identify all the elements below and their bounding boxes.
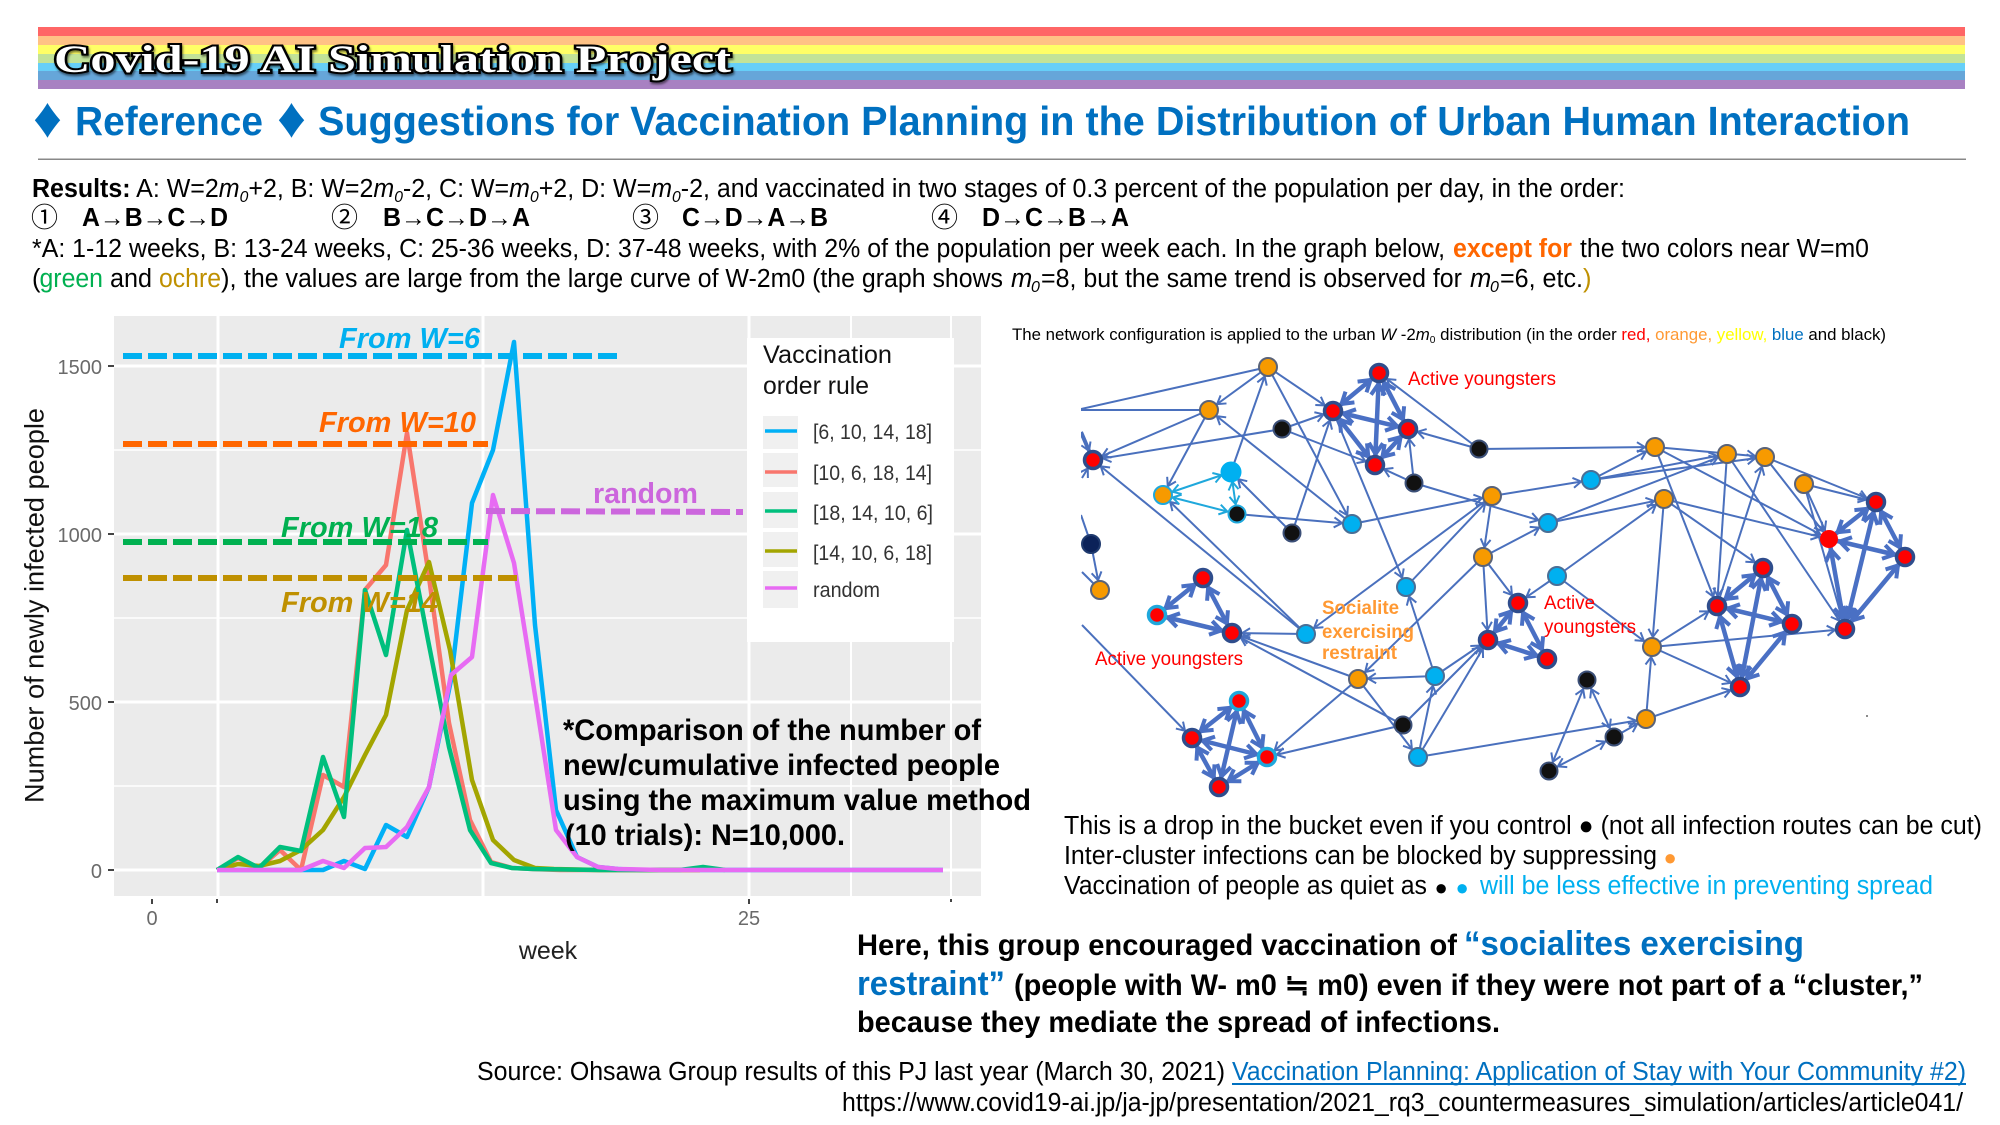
network annotation labels: restraint [1322,643,1398,664]
results text block: =6, etc. [1500,265,1583,293]
conclusion callout: Here, this group encouraged vaccination of [857,929,1457,962]
x axis title: week [518,937,578,965]
network explanation text: Vaccination of people as quiet as [1064,872,1427,900]
results text block: *A: 1-12 weeks, B: 13-24 weeks, C: 25-36 weeks, D: 37-48 weeks, with 2% of the population per week each. In the graph below, [32,235,1445,263]
network caption: 0 [1430,335,1436,346]
legend [747,338,954,642]
curve labels: From W=14 [281,587,438,619]
x axis tick labels: 0 [146,908,158,930]
results text block: m [1470,265,1491,293]
results text block: D→C→B→A [982,204,1129,232]
light-blue edges [1163,472,1237,514]
source citation [477,1058,1966,1117]
network annotation labels: youngsters [1544,617,1636,638]
conclusion callout: because they mediate the spread of infections. [857,1006,1500,1039]
x axis tick labels: 25 [738,908,760,930]
results text block: -2, and vaccinated in two stages of 0.3 percent of the population per day, in the order: [681,175,1625,203]
conclusion callout: restraint” [857,965,1005,1003]
results text block: =8, but the same trend is observed for [1041,265,1462,293]
results text block: C→D→A→B [682,204,828,232]
heading: Suggestions for Vaccination Planning in the Distribution of Urban Human Interaction [318,98,1910,144]
legend: [6, 10, 14, 18] [813,421,932,444]
results text block: and [110,265,152,293]
dashed reference lines [123,356,743,578]
network annotation labels: exercising [1322,622,1414,643]
results text block: B→C→D→A [383,204,530,232]
results text block: 0 [530,189,539,206]
blue nodes [1222,462,1600,766]
y axis tick labels [58,357,951,904]
network explanation text: ● [1664,845,1677,870]
results text block: ③ [632,203,659,233]
results text block: 0 [672,189,681,206]
results text block: m [373,175,394,203]
network explanation text: Inter-cluster infections can be blocked by suppressing [1064,842,1657,870]
results text block: ), [221,265,237,293]
results text block: 0 [1490,279,1499,296]
source citation: Source: Ohsawa Group results of this PJ last year (March 30, 2021) [477,1058,1225,1086]
chart annotation: (10 trials): N=10,000. [565,819,845,852]
chart annotation: *Comparison of the number of [563,714,981,747]
network annotation labels: Socialite [1322,598,1399,619]
heading: Reference [75,98,263,144]
legend: Vaccination [763,341,892,369]
network caption: red, orange, yellow, blue and black) [1621,326,1884,344]
results text block: green [40,265,103,293]
heading: ♦ [277,86,306,150]
network explanation text [1064,812,1982,900]
chart annotation: new/cumulative infected people [563,749,1000,782]
curve labels: From W=10 [319,407,476,439]
results text block: ) [1583,265,1592,293]
results text block: m [509,175,530,203]
y axis title: Number of newly infected people [20,408,50,803]
network annotation labels: Active youngsters [1095,649,1243,670]
source citation: https://www.covid19-ai.jp/ja-jp/presentation/2021_rq3_countermeasures_simulation/articles/article041/ [842,1089,1964,1117]
legend: [10, 6, 18, 14] [813,462,932,485]
results text block: ochre [159,265,221,293]
conclusion callout: (people with W- m0 ≒ m0) even if they were not part of a “cluster,” [1014,969,1923,1002]
heading: ♦ [33,86,62,150]
network annotation labels [1095,369,1636,670]
network caption: distribution (in the order [1435,326,1621,344]
results text block: m [1011,265,1032,293]
results text block: ④ [931,203,958,233]
legend: order rule [763,372,869,400]
orange nodes [1091,358,1813,728]
results text block: +2, D: W= [539,175,651,203]
legend: random [813,579,880,602]
results text block: 0 [240,189,248,206]
rainbow title banner [38,27,1965,89]
results text block: m [651,175,672,203]
curve labels: random [593,478,698,510]
network annotation labels: Active [1544,593,1595,614]
results text block: ② [331,203,358,233]
conclusion callout [857,925,1923,1039]
results text block: ( [32,265,41,293]
thick cluster edges [1157,373,1905,787]
y axis tick labels: 0 [91,861,102,883]
results text block [31,175,1869,296]
network explanation text: ● [1456,875,1469,900]
network diagram [1081,358,1914,796]
chart annotation [563,714,1031,852]
results text block: the two colors near W=m0 [1580,235,1869,263]
y axis tick labels: 1000 [58,525,102,547]
legend: [18, 14, 10, 6] [813,502,933,525]
network explanation text: This is a drop in the bucket even if you control ● (not all infection routes can be cut) [1064,812,1982,840]
legend: [14, 10, 6, 18] [813,542,932,565]
y axis tick labels: 500 [69,693,102,715]
results text block: except for [1453,235,1572,263]
y axis tick labels: 1500 [58,357,102,379]
plot panel [114,316,981,896]
curves [217,342,943,870]
source citation: Vaccination Planning: Application of Stay with Your Community #2) [1232,1058,1966,1086]
project title: Covid-19 AI Simulation Project [54,38,731,81]
results text block: 0 [394,189,403,206]
results text block: ① [31,203,58,233]
results text block: +2, B: W=2 [248,175,373,203]
thin edges [1081,367,1876,771]
chart annotation: using the maximum value method [563,784,1031,817]
results text block: 0 [1031,279,1040,296]
results text block: -2, C: W= [403,175,509,203]
network annotation labels: Active youngsters [1408,369,1556,390]
network explanation text: ● [1434,875,1448,900]
curve labels: From W=6 [339,323,481,355]
conclusion callout: “socialites exercising [1464,925,1804,963]
results text block: A→B→C→D [82,204,228,232]
black nodes [1082,420,1622,780]
results text block: the values are large from the large curve of W-2m0 (the graph shows [244,265,1003,293]
red nodes [1084,364,1914,796]
network caption: The network configuration is applied to the urban W -2m [1012,326,1430,344]
x axis tick labels [146,908,760,930]
network explanation text: will be less effective in preventing spread [1479,872,1933,900]
curve labels: From W=18 [281,512,439,544]
curve labels [281,323,698,619]
results text block: Results: A: W=2m [32,175,240,203]
heading [33,86,1910,150]
line chart: newly infected people per week [20,316,1031,965]
